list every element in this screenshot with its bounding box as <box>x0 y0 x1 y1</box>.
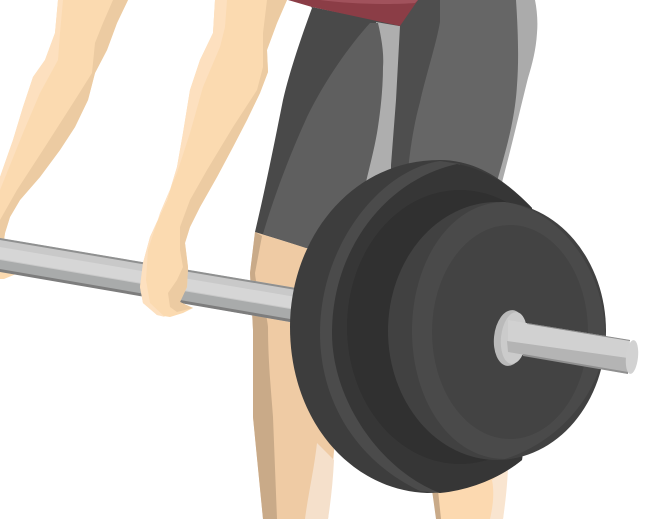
shorts: near leg dark side <box>255 0 405 250</box>
sleeve collar face <box>498 311 530 365</box>
shorts <box>255 0 537 250</box>
back plate <box>290 160 540 493</box>
shorts: far leg front panel <box>407 0 518 185</box>
left arm <box>0 0 128 240</box>
sleeve shaft edges <box>527 323 630 341</box>
shorts: near leg front panel <box>263 23 383 250</box>
middle plate recess <box>347 190 573 464</box>
back plate rim <box>320 161 480 493</box>
barbell bar <box>0 238 296 323</box>
barbell sleeve <box>491 308 640 375</box>
sleeve end cap <box>624 339 640 375</box>
front plate face <box>412 202 605 459</box>
sleeve shaft <box>508 320 630 374</box>
shorts: far leg dark side <box>391 0 450 185</box>
hand fragment at left edge <box>0 270 16 279</box>
shirt hem <box>288 0 418 26</box>
near leg <box>250 232 335 519</box>
front plate <box>388 202 606 460</box>
sleeve collar <box>491 308 529 368</box>
far leg <box>432 465 508 519</box>
middle plate <box>332 164 540 493</box>
shorts: far leg highlight <box>480 0 537 190</box>
right arm and hand <box>140 0 287 317</box>
weight plates <box>290 160 606 493</box>
shorts: inner gap <box>360 22 405 200</box>
front plate centre <box>432 225 588 439</box>
sleeve shaft shadow <box>507 341 628 373</box>
